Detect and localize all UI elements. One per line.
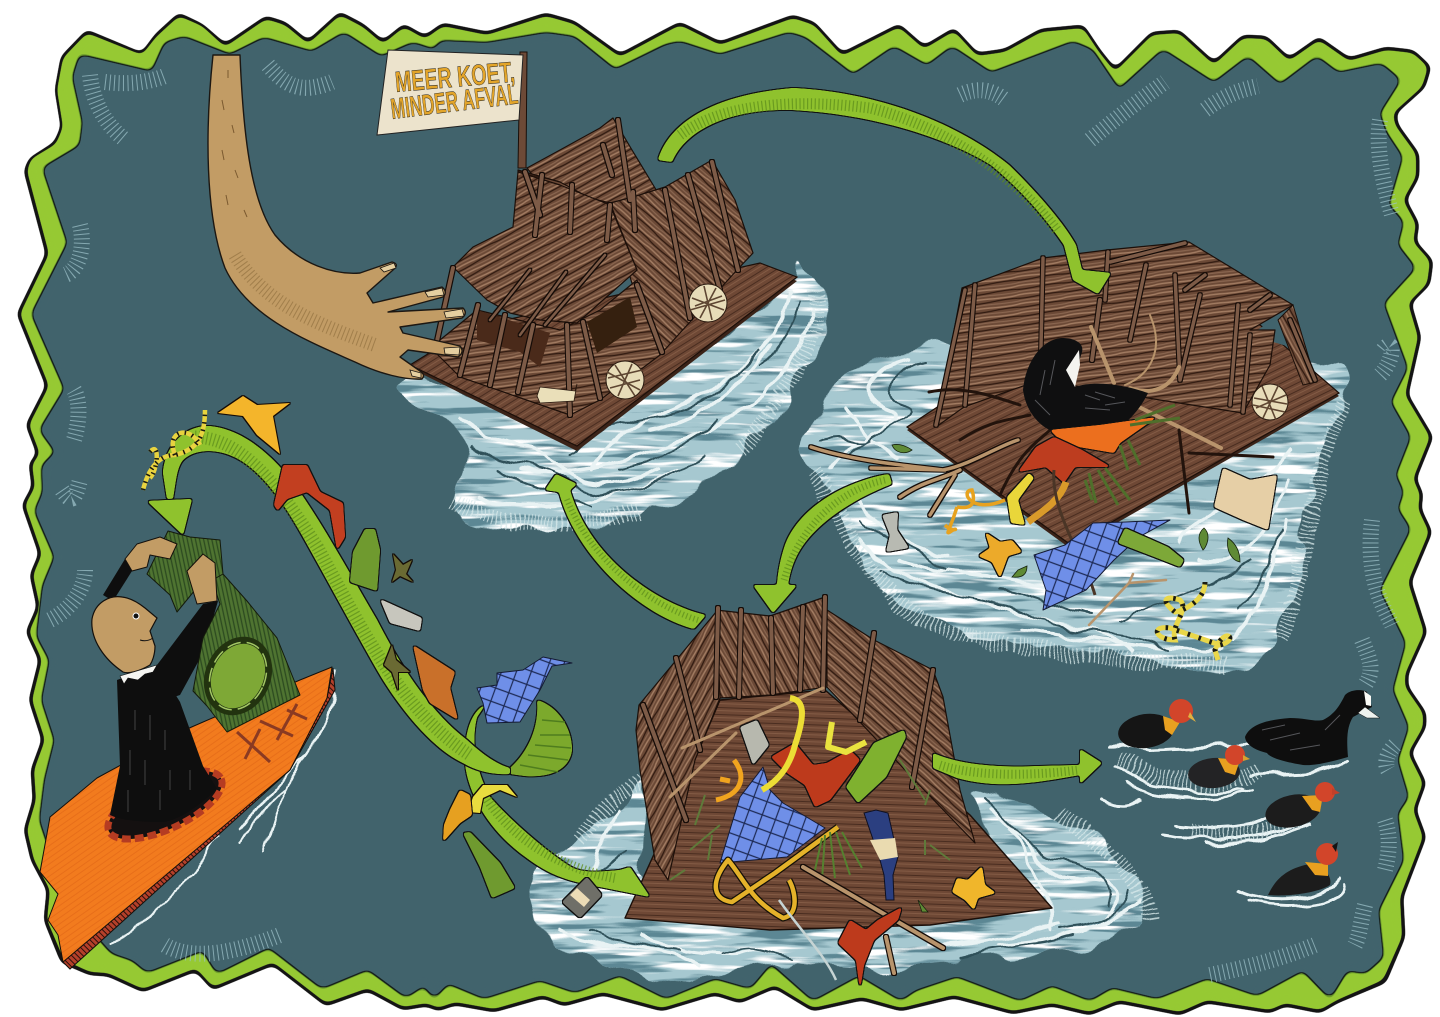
water swirl 3 around the empty nest	[530, 777, 1150, 983]
green reeds	[1085, 405, 1180, 505]
cream patch	[537, 384, 577, 403]
grass bundle	[815, 832, 862, 880]
flag	[377, 50, 523, 135]
chick four	[1268, 842, 1338, 895]
willow twigs	[670, 760, 950, 880]
sticks falling over edge	[775, 867, 943, 980]
kayak deck	[40, 667, 332, 962]
water 2 streaks	[815, 360, 1345, 665]
large ribbon arrow from the nest to the bag	[143, 396, 650, 918]
smile	[140, 638, 153, 641]
kayak with person	[40, 531, 335, 969]
wool ball front	[606, 361, 644, 399]
cockpit rim	[99, 757, 231, 853]
upper sweep	[163, 426, 510, 774]
dented can	[882, 512, 909, 552]
can label	[570, 888, 590, 907]
flag text line two: MINDER AFVAL	[389, 79, 520, 126]
chick three	[1262, 782, 1340, 832]
wall posts	[936, 243, 1315, 425]
bag top fold	[147, 531, 223, 612]
loop ribs	[520, 720, 571, 772]
front roof	[453, 172, 637, 323]
chick two	[1187, 745, 1250, 790]
wool ball	[1252, 384, 1288, 420]
bag stand struts	[237, 704, 307, 762]
dangling dark twig	[1054, 470, 1095, 595]
arrow hatch	[940, 765, 1078, 774]
arrow body	[658, 88, 1111, 294]
orange cloth litter	[413, 645, 458, 720]
raft edge	[410, 265, 797, 451]
arrow: nest 1 to nest 2	[658, 88, 1111, 294]
yellow zigzag ribbon	[828, 722, 866, 752]
green bottle litter	[350, 529, 380, 591]
person torso	[110, 665, 217, 822]
kayak hull side	[63, 668, 335, 969]
green bottle	[846, 730, 906, 803]
red leaf dangling	[838, 907, 902, 990]
arrow: nest 3 back to nest 1	[545, 474, 706, 629]
can lower	[562, 877, 602, 918]
wall posts	[643, 597, 933, 820]
adult shield	[1364, 691, 1371, 706]
yellow ribbon litter	[468, 785, 517, 813]
coot feather lines	[1035, 360, 1125, 415]
yellow ribbon	[1007, 473, 1034, 525]
grey can	[740, 720, 769, 765]
nest 3: empty frame filled with litter	[625, 597, 1052, 990]
arm hatch texture	[235, 255, 375, 345]
flag pole	[518, 52, 527, 168]
white collar	[120, 665, 157, 684]
water 1 body	[390, 250, 832, 528]
adult coot	[1245, 690, 1380, 765]
raft edge	[907, 305, 1339, 549]
upper sweep hatch	[195, 437, 470, 755]
striped ribbon loops	[1157, 582, 1230, 660]
water swirl 1 under the intact nest	[390, 250, 832, 528]
water 2 body	[800, 343, 1349, 670]
gold band	[1028, 482, 1066, 522]
blue checked cloth	[720, 767, 825, 863]
flag text: MEER KOET,	[394, 57, 516, 99]
woven wall	[936, 242, 1293, 427]
raft deck	[410, 263, 797, 446]
head	[92, 597, 157, 673]
striped rope on arrow	[143, 410, 205, 490]
adult plumage	[1262, 715, 1340, 750]
orange cloth	[1050, 417, 1157, 453]
arrow body	[545, 474, 706, 629]
nest 1: intact woven shelter on a raft	[377, 50, 797, 451]
swimming coot family	[1100, 690, 1380, 905]
small green leaf	[918, 900, 928, 912]
left wall	[636, 612, 720, 880]
loop band	[510, 700, 572, 776]
teal gap in wall	[1250, 305, 1300, 350]
yellow leaf litter	[218, 396, 290, 454]
arrow hatch	[566, 497, 698, 620]
orange arc	[716, 760, 741, 800]
lower sweep to nest 3	[465, 704, 650, 897]
orange star leaf	[978, 532, 1022, 578]
green recycling bag	[147, 531, 300, 732]
arrow: nest 3 to swimming coots	[933, 749, 1102, 784]
shelter posts	[435, 120, 738, 415]
orange ribbon litter	[443, 790, 472, 842]
recycle arrows	[199, 633, 277, 719]
olive leaf on ribbon	[384, 645, 410, 690]
nest 2: nest filled with a coot and litter	[811, 242, 1339, 660]
coot body	[1023, 338, 1148, 434]
blue bottle	[864, 810, 898, 900]
cream rag	[1214, 468, 1277, 530]
nest sticks	[929, 315, 1273, 513]
red leaf	[1018, 437, 1111, 483]
wake lines	[1100, 745, 1348, 905]
orange ribbon loops	[945, 490, 1005, 533]
wool ball right	[689, 284, 727, 322]
adult beak	[1358, 707, 1380, 718]
blue cloth litter	[477, 657, 572, 723]
arrow: nest 2 to nest 3	[753, 474, 892, 613]
sweater texture	[128, 710, 190, 812]
back wall	[716, 597, 827, 698]
eye	[133, 613, 139, 619]
red ribbon litter	[274, 465, 345, 550]
water 3 body	[530, 777, 1150, 983]
fingernails	[380, 263, 464, 378]
grey can litter	[380, 599, 422, 631]
left arm sleeve	[103, 559, 132, 601]
dark doorway left	[477, 310, 550, 367]
arrow hatch	[784, 480, 885, 580]
water 1 streaks	[450, 290, 817, 524]
lower sweep hatch	[482, 790, 615, 878]
arm silhouette	[208, 55, 465, 379]
bottle label	[870, 838, 898, 860]
arrow body	[933, 749, 1102, 784]
right wall	[827, 610, 975, 843]
red cloth	[771, 743, 860, 807]
dark doorway right	[587, 297, 637, 353]
kayak wake	[110, 670, 335, 945]
right wall panel	[610, 160, 753, 355]
upper roof	[518, 170, 637, 323]
right arm sleeve	[157, 601, 218, 700]
recycle logo ring	[196, 630, 280, 722]
yellow rope	[716, 827, 838, 918]
yellow ribbon	[762, 698, 802, 790]
raft deck	[625, 690, 1052, 930]
front lower wall	[433, 280, 660, 415]
water swirl 2 under the coot nest	[800, 343, 1349, 670]
water 3 streaks	[560, 780, 1150, 965]
arrow body	[753, 474, 892, 613]
arm shading and hair	[222, 70, 247, 217]
blue checked cloth	[1034, 520, 1170, 610]
small floating leaves	[892, 444, 1240, 577]
raft deck	[907, 300, 1339, 545]
green bottle lower	[463, 832, 515, 898]
right wall end	[1278, 305, 1316, 385]
green bottle	[1118, 528, 1184, 567]
human arm and hand placing the nest	[208, 55, 465, 379]
back roof panel	[527, 118, 658, 210]
floating twig	[1089, 574, 1166, 625]
long branch	[811, 440, 1018, 515]
olive leaf litter	[392, 554, 413, 582]
yellow star leaf	[952, 866, 996, 910]
arrow head at bag	[147, 499, 192, 535]
left hand	[125, 537, 177, 571]
arrow hatch	[680, 104, 1058, 232]
long sticks on deck	[670, 688, 823, 797]
right hand	[187, 554, 217, 604]
coot white bill	[1066, 350, 1080, 387]
chick one	[1116, 699, 1196, 752]
